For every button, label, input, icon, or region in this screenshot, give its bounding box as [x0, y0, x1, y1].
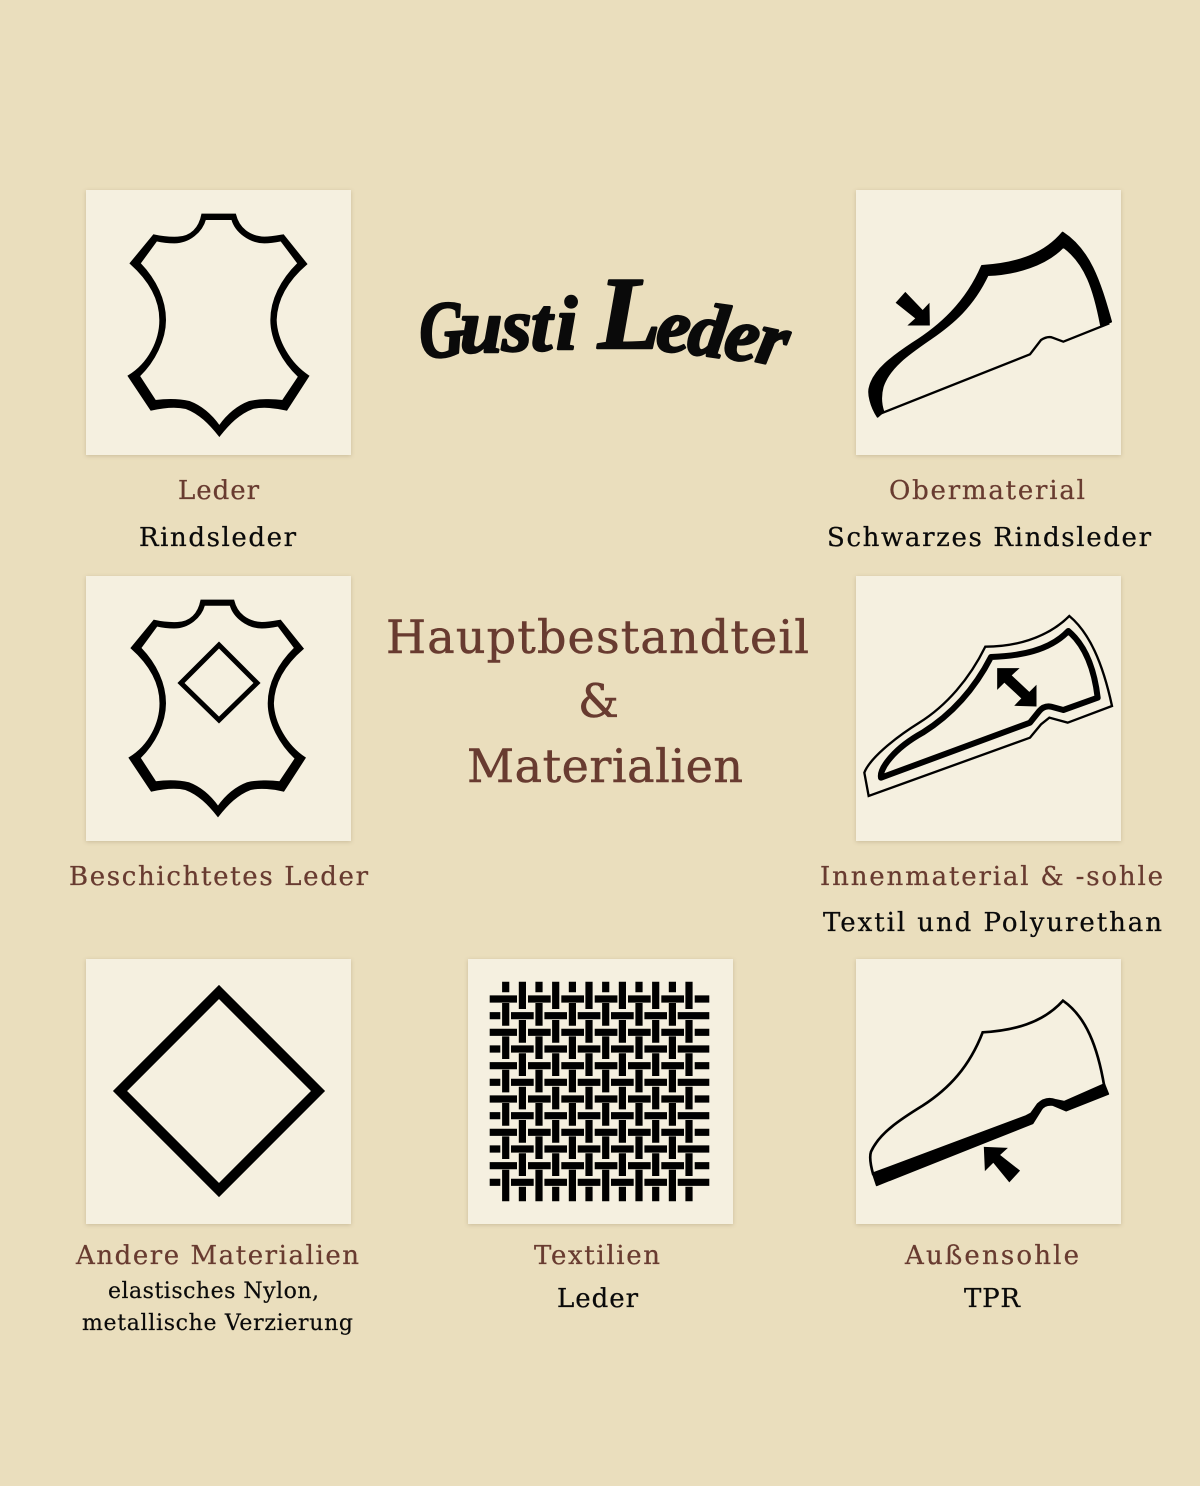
- tile background: [468, 959, 733, 1224]
- value: Rindsleder: Rindsleder: [139, 523, 297, 553]
- icon: leather hide: [128, 214, 309, 436]
- label: Andere Materialien: Andere Materialien: [75, 1241, 359, 1271]
- panel: Leder: [86, 190, 351, 553]
- panel: Außensohle: [856, 959, 1121, 1314]
- value: Leder: Leder: [557, 1284, 639, 1314]
- icon: woven textile: [490, 982, 709, 1201]
- double arrow: [998, 669, 1036, 706]
- label: Textilien: Textilien: [534, 1241, 660, 1271]
- heading: Hauptbestandteil & Materialien: &: [578, 674, 619, 728]
- value: elastisches Nylon, metallische Verzierung: elastisches Nylon,: [108, 1279, 319, 1304]
- panel: Beschichtetes Leder: [69, 576, 369, 892]
- label: Leder: Leder: [178, 476, 260, 506]
- icon: shoe with highlighted lining: [864, 616, 1112, 796]
- heading: Hauptbestandteil & Materialien: Hauptbestandteil: [386, 610, 809, 664]
- tile background: [86, 190, 351, 455]
- tile background: [856, 576, 1121, 841]
- label: Beschichtetes Leder: Beschichtetes Leder: [69, 862, 369, 892]
- icon: shoe with highlighted outsole: [870, 1001, 1108, 1185]
- value: Schwarzes Rindsleder: Schwarzes Rindsleder: [827, 523, 1152, 553]
- value: elastisches Nylon, metallische Verzierung: metallische Verzierung: [82, 1311, 353, 1336]
- value: elastisches Nylon, metallische Verzierung: [82, 1279, 353, 1336]
- heading: Hauptbestandteil & Materialien: Materialien: [467, 739, 743, 793]
- icon: coated leather hide: [129, 600, 305, 816]
- label: Außensohle: Außensohle: [904, 1241, 1079, 1271]
- heading: Hauptbestandteil & Materialien: [386, 610, 809, 793]
- value: TPR: TPR: [964, 1284, 1021, 1314]
- panel: Textilien: [468, 959, 733, 1314]
- tile background: [86, 576, 351, 841]
- logo: Gusti Leder: eder: [654, 283, 798, 384]
- icon: large diamond: [120, 992, 318, 1190]
- label: Innenmaterial & -sohle: Innenmaterial & -sohle: [820, 862, 1163, 892]
- icon: small diamond: [181, 645, 257, 720]
- tile background: [86, 959, 351, 1224]
- tile background: [856, 959, 1121, 1224]
- logo: Gusti Leder: [416, 257, 798, 384]
- panel: Innenmaterial und -sohle: [820, 576, 1163, 938]
- label: Obermaterial: Obermaterial: [889, 476, 1085, 506]
- panel: Andere Materialien: [75, 959, 359, 1336]
- panel: Obermaterial: [827, 190, 1152, 553]
- logo: Gusti Leder: L: [597, 257, 661, 371]
- value: Textil und Polyurethan: Textil und Polyurethan: [823, 908, 1162, 938]
- logo: Gusti Leder: usti: [460, 282, 577, 369]
- icon: shoe with highlighted upper: [869, 233, 1111, 417]
- arrow pointing at upper: [896, 293, 929, 325]
- logo: Gusti Leder: G: [416, 284, 467, 376]
- arrow pointing at outsole: [984, 1147, 1019, 1182]
- tile background: [856, 190, 1121, 455]
